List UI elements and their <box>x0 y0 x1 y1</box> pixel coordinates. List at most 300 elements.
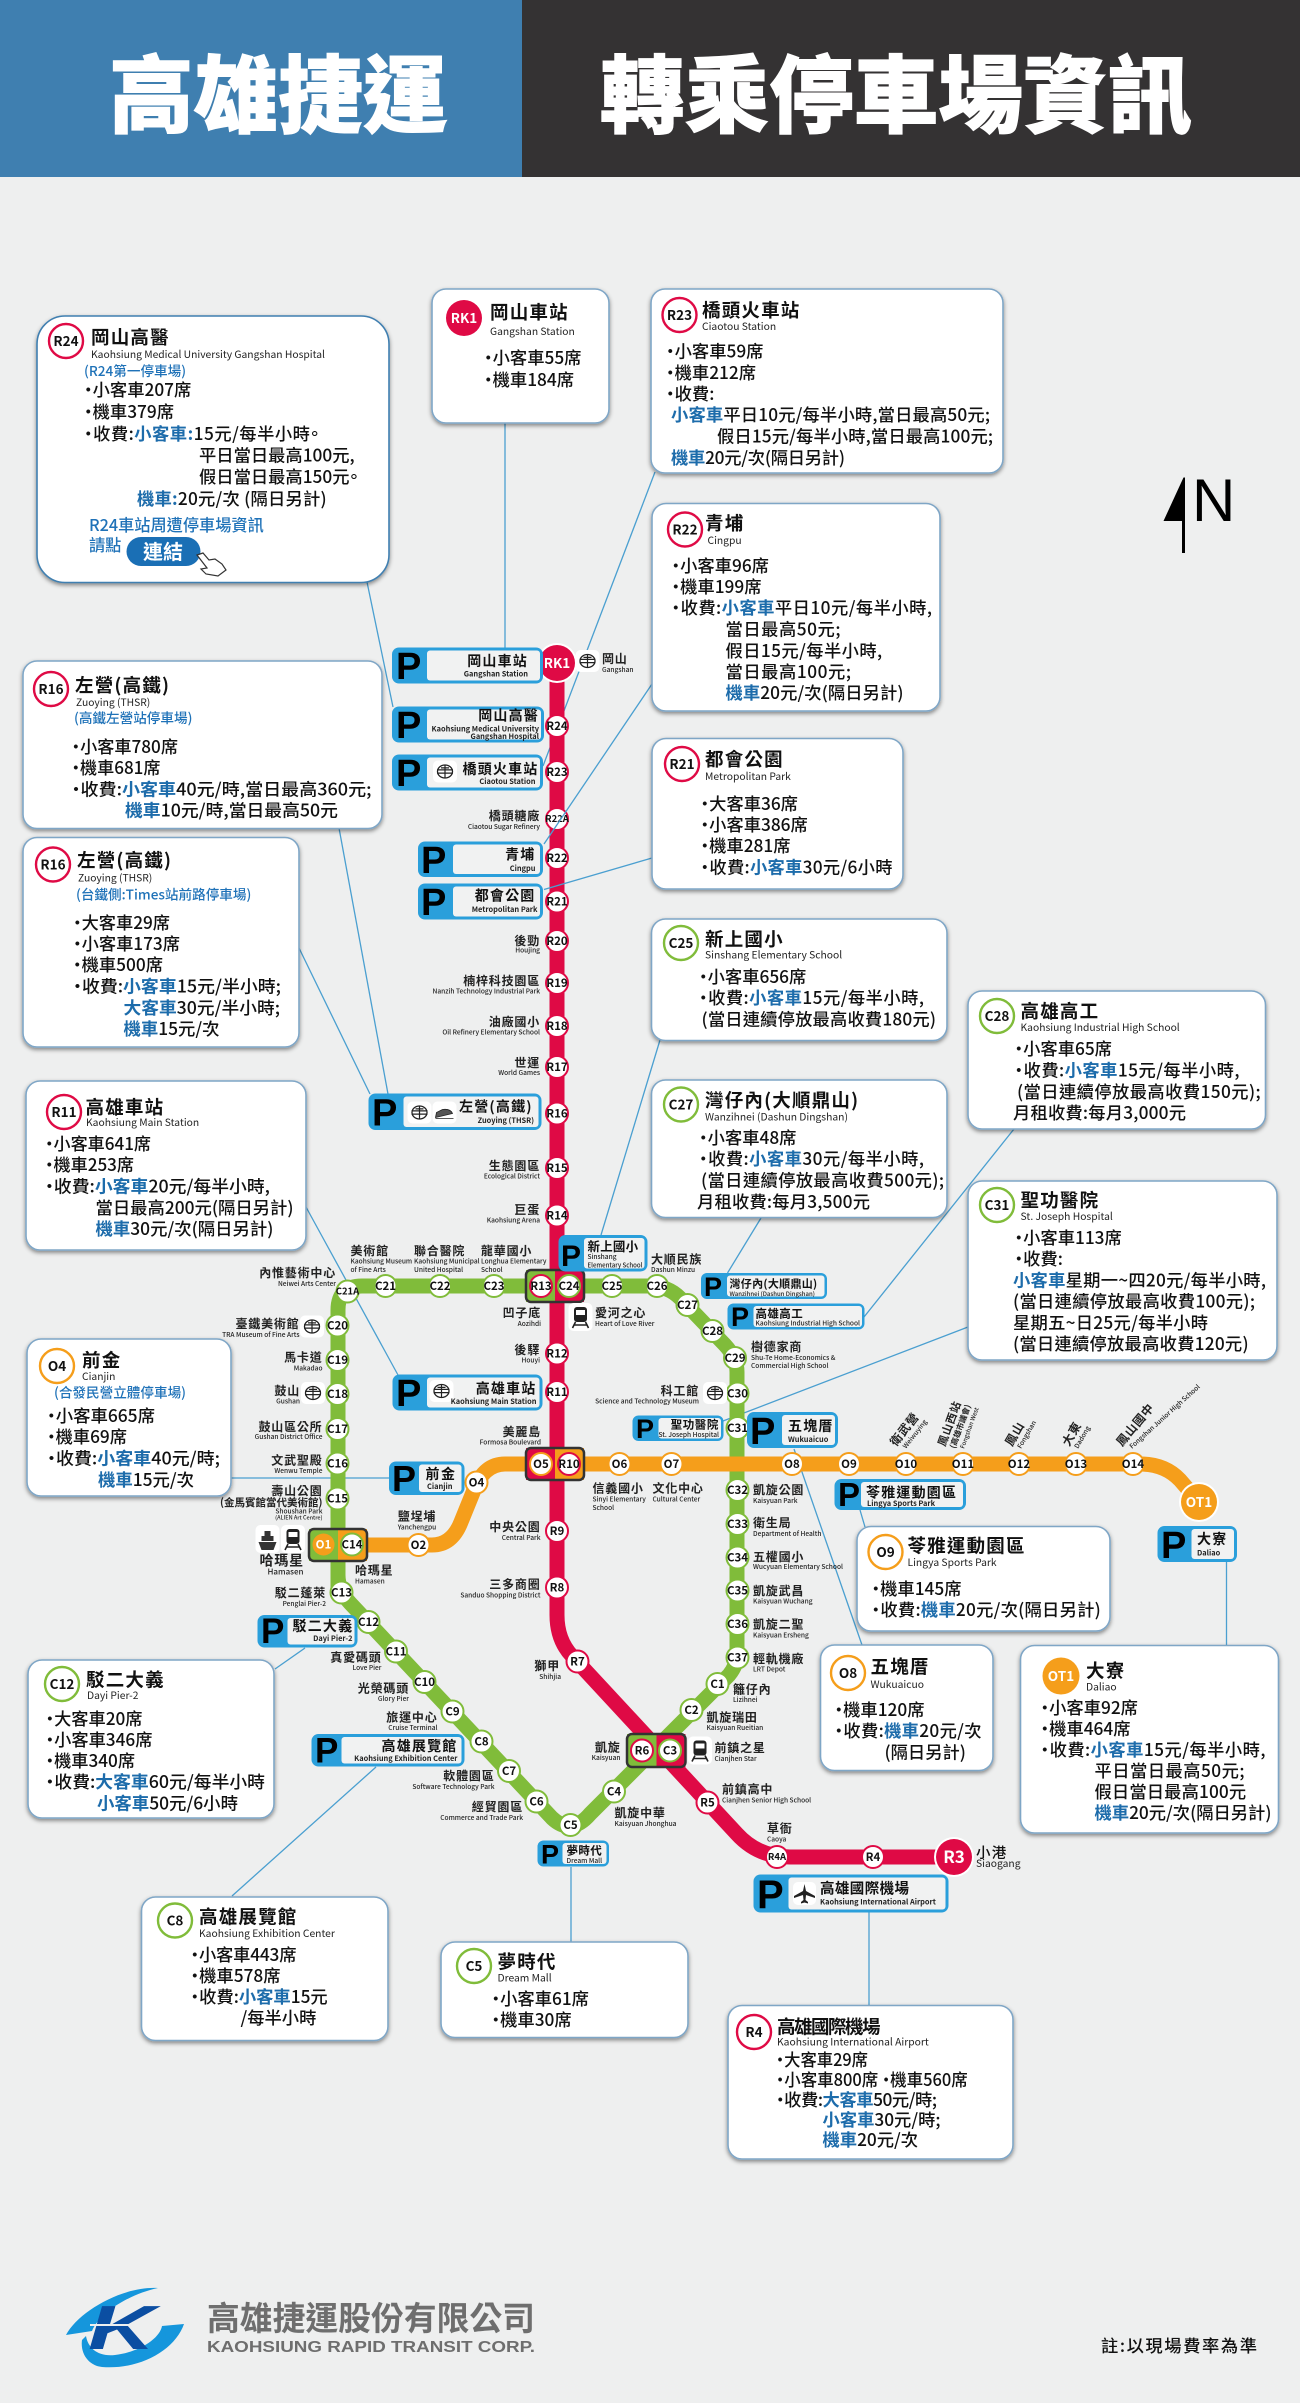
red line stations: R22A <box>545 811 570 825</box>
station labels: green line west: 鼓山 <box>274 1382 300 1399</box>
subtitle: R4: Kaohsiung International Airport <box>777 2034 929 2048</box>
P sign: St. Joseph Hospital: P <box>636 1414 654 1444</box>
station labels: red line: 油廠國小 <box>489 1013 540 1030</box>
details: R23: 小客車平日10元/每半小時,當日最高50元; <box>671 401 990 426</box>
details: C8 <box>190 1941 328 2029</box>
green line stations: C11 <box>385 1644 407 1660</box>
details: C12: ·大客車20席 <box>46 1705 142 1730</box>
icon: north arrow <box>1164 467 1235 553</box>
interchange: O5 R10: R10 <box>558 1456 580 1472</box>
details: C5 <box>492 1985 589 2031</box>
station labels: green line east: 五權國小 <box>753 1548 804 1565</box>
details: R21: ·收費:小客車30元/6小時 <box>700 854 892 878</box>
red line stations: R9 <box>550 1523 565 1539</box>
P sign: Gangshan Station <box>392 646 543 688</box>
orange line stations: O14 <box>1122 1456 1144 1472</box>
panel: RK1 Gangshan Station <box>432 289 609 423</box>
details: R24: 機車:20元/次 (隔日另計) <box>137 485 327 510</box>
details: OT1: 假日當日最高100元 <box>1094 1778 1246 1803</box>
station labels: green line east: 凱旋武昌 <box>753 1582 804 1599</box>
P sign: KMU Gangshan Hospital: P <box>396 705 421 747</box>
station labels: red line: 美麗島 <box>503 1423 541 1440</box>
P sign: St. Joseph Hospital: St. Joseph Hospital <box>658 1429 719 1439</box>
green line stations: C18 <box>327 1386 348 1402</box>
green line stations: C25 <box>601 1278 623 1294</box>
station labels: red line: Sanduo Shopping District <box>460 1590 541 1600</box>
panel: C27 Wanzihnei <box>652 1080 947 1218</box>
details: O4 <box>47 1382 220 1491</box>
P sign: Gangshan Station: P <box>396 646 421 688</box>
panel: C31 St. Joseph Hospital <box>968 1181 1277 1360</box>
details: R16: ·收費:小客車40元/時,當日最高360元; <box>72 776 372 800</box>
green line stations: C34 <box>727 1550 748 1566</box>
red line stations: R19 <box>546 975 568 991</box>
station labels: red line: Ciaotou Sugar Refinery <box>468 821 540 831</box>
P sign: Wukuaicuo: Wukuaicuo <box>788 1434 829 1445</box>
metro line: orange line <box>366 1464 1199 1545</box>
orange line stations: OT1 <box>1186 1491 1212 1511</box>
green line stations: C13 <box>331 1584 352 1600</box>
green line stations: C37 <box>727 1650 748 1666</box>
details: R22: 機車20元/次(隔日另計) <box>726 679 904 704</box>
details: R24: ·機車379席 <box>84 398 174 423</box>
orange line stations: O12 <box>1008 1456 1030 1472</box>
station labels: red line: Kaohsiung Arena <box>487 1214 540 1224</box>
details: C27: 月租收費:每月3,500元 <box>697 1188 870 1213</box>
details: C25: (當日連續停放最高收費180元) <box>702 1006 936 1030</box>
details: R16: ·機車681席 <box>72 754 160 779</box>
station labels: red line: Cianjhen Senior High School <box>722 1794 811 1804</box>
subtitle: C12: Dayi Pier-2 <box>87 1687 139 1702</box>
station labels: green line east: 前鎮之星 <box>714 1739 766 1756</box>
details: O9: ·機車145席 <box>872 1575 962 1600</box>
panel: R16 Zuoying Times lot <box>23 838 299 1047</box>
details: R24: ·小客車207席 <box>84 376 191 401</box>
details: O8: (隔日另計) <box>884 1738 966 1764</box>
station labels: green line west: Neiwei Arts Center <box>278 1278 336 1288</box>
subtitle: C28: Kaohsiung Industrial High School <box>1020 1019 1180 1034</box>
station labels: green line east: Kaisyuan Jhonghua <box>614 1818 677 1828</box>
P sign: Wukuaicuo: 五塊厝 <box>788 1416 834 1436</box>
station labels: green line west: Commerce and Trade Park <box>440 1812 523 1822</box>
station labels: green line west: Kaohsiung Museum <box>350 1256 412 1266</box>
subtitle: C5: Dream Mall <box>498 1970 552 1984</box>
title: Kaohsiung Metro: 高雄捷運 <box>109 29 447 151</box>
badge: C27 <box>664 1088 698 1122</box>
details: C8: /每半小時 <box>240 2004 316 2029</box>
station labels: green line east: Shu-Te Home-Economics & <box>751 1352 836 1362</box>
connector lines <box>231 423 1226 2006</box>
P sign: International Airport: P <box>757 1873 784 1917</box>
station labels: green line west: Love Pier <box>353 1662 382 1672</box>
details: C25 <box>699 963 936 1030</box>
station labels: red line: Kaisyuan <box>592 1752 620 1762</box>
station labels: red line: 獅甲 <box>534 1657 560 1674</box>
station labels: green line west: Wenwu Temple <box>274 1465 323 1475</box>
station labels: green line west: 經貿園區 <box>472 1798 523 1815</box>
heading: R16: 左營(高鐵) <box>75 672 170 698</box>
details: C27 <box>697 1124 944 1213</box>
green line stations: C1 <box>710 1676 725 1692</box>
station labels: green line east: 籬仔內 <box>733 1680 771 1698</box>
P sign: Cianjin: Cianjin <box>427 1481 453 1492</box>
badge: C12 <box>45 1667 79 1701</box>
station labels: green line east: Science and Technology Museum <box>595 1396 699 1406</box>
P sign: Sinshang Elementary: 新上國小 <box>588 1236 639 1255</box>
P sign: Cingpu: P <box>421 840 446 882</box>
details: R11: ·收費:小客車20元/每半小時, <box>45 1172 270 1198</box>
details: R11: 機車30元/次(隔日另計) <box>96 1215 274 1240</box>
details: C27: ·收費:小客車30元/每半小時, <box>699 1145 924 1170</box>
heading: OT1: 大寮 <box>1086 1658 1125 1684</box>
station labels: green line west: 文武聖殿 <box>271 1452 322 1468</box>
red line stations: R4A <box>768 1849 787 1863</box>
P sign: KMU Gangshan Hospital: 岡山高醫 <box>478 706 539 726</box>
P sign: Sinshang Elementary: P <box>561 1240 581 1273</box>
subtitle: O9: Lingya Sports Park <box>908 1554 997 1569</box>
details: R16: (高鐵左營站停車場) <box>74 707 192 727</box>
station labels: orange line: (高雄市議會) <box>947 1403 974 1450</box>
badge: C25 <box>664 926 698 960</box>
green line stations: C21A <box>336 1284 360 1298</box>
subtitle: R21: Metropolitan Park <box>705 768 791 783</box>
station labels: red line: Oil Refinery Elementary School <box>442 1026 540 1036</box>
station labels: red line: 後驛 <box>514 1341 540 1358</box>
red line stations <box>537 643 974 1877</box>
station labels: green line west: 旅運中心 <box>386 1708 438 1726</box>
P sign: Lingya Sports Park: Lingya Sports Park <box>867 1498 936 1509</box>
details: C28: ·小客車65席 <box>1014 1035 1112 1060</box>
station labels: red line: Gangshan <box>602 664 634 674</box>
station labels: orange line: Fongshan <box>1014 1418 1038 1450</box>
details: R16 <box>72 707 372 822</box>
badge: R22: R22 <box>672 518 698 538</box>
logo: Kaohsiung Rapid Transit <box>66 2288 535 2367</box>
P sign: Zuoying THSR: 左營(高鐵) <box>459 1096 533 1116</box>
P sign: Lingya Sports Park: P <box>838 1476 860 1513</box>
station labels: orange line: 文化中心 <box>652 1480 704 1496</box>
P sign: Sinshang Elementary: Sinshang <box>588 1251 617 1261</box>
badge: C5: C5 <box>466 1955 482 1975</box>
P sign: Wanzihnei: 灣仔內(大順鼎山) <box>730 1276 818 1292</box>
station labels: orange line: Fongshan West <box>957 1405 981 1450</box>
heading: C28: 高雄高工 <box>1020 998 1099 1024</box>
station labels: green line east: Department of Health <box>753 1528 821 1538</box>
P sign: Zuoying THSR: P <box>372 1092 397 1134</box>
station labels: red line: Caoya <box>767 1834 787 1844</box>
details: O8: ·收費:機車20元/次 <box>834 1717 982 1742</box>
details: C8: ·收費:小客車15元 <box>190 1983 328 2008</box>
details: C12: ·機車340席 <box>46 1747 135 1772</box>
station labels: green line west: 龍華國小 <box>481 1242 532 1259</box>
station labels: green line west: 軟體園區 <box>443 1767 494 1784</box>
details: R4: ·小客車800席 ·機車560席 <box>776 2066 968 2091</box>
red line stations: R20 <box>546 933 568 949</box>
red line stations: R8 <box>550 1580 565 1596</box>
details: R23 <box>666 338 993 469</box>
details: R23: 機車20元/次(隔日另計) <box>671 444 845 469</box>
details: R11: ·機車253席 <box>45 1151 134 1176</box>
details: R16: ·小客車173席 <box>73 930 180 955</box>
details: R24: 請點 <box>89 532 121 556</box>
station labels: red line: Shihjia <box>539 1671 561 1681</box>
badge: O8: O8 <box>839 1662 857 1682</box>
P sign: Gangshan Station: Gangshan Station <box>464 668 528 680</box>
badge: C28: C28 <box>985 1005 1009 1025</box>
details: R16 <box>73 884 281 1040</box>
subtitle: C8: Kaohsiung Exhibition Center <box>199 1925 336 1940</box>
heading: C25: 新上國小 <box>705 926 784 952</box>
details: OT1: ·機車464席 <box>1040 1715 1131 1740</box>
station labels: green line east: Kaisyuan Rueitian <box>706 1722 763 1732</box>
green line stations: C21 <box>375 1278 396 1294</box>
badge: RK1 <box>446 300 482 336</box>
station labels: green line east: 衛生局 <box>753 1514 791 1531</box>
badge: C31: C31 <box>985 1194 1009 1214</box>
station labels: red line: 中央公園 <box>489 1518 540 1535</box>
station labels: green line west: Gushan District Office <box>255 1431 323 1441</box>
badge: O9: O9 <box>876 1541 895 1561</box>
connector: R23 behind the red line <box>543 472 655 766</box>
subtitle: C31: St. Joseph Hospital <box>1020 1208 1113 1223</box>
station labels: red line: 凹子底 <box>503 1304 541 1321</box>
P sign: St. Joseph Hospital: 聖功醫院 <box>671 1416 719 1432</box>
station labels: orange line: Sinyi Elementary <box>592 1494 646 1504</box>
red line stations: RK1 <box>544 652 570 672</box>
P sign: Daliao: P <box>1161 1525 1186 1567</box>
icon: ferry <box>256 1525 280 1553</box>
subtitle: OT1: Daliao <box>1086 1678 1117 1694</box>
P sign: Cingpu: 青埔 <box>505 844 536 864</box>
badge: R22 <box>668 512 702 546</box>
station labels: red line: Siaogang <box>976 1855 1021 1870</box>
green line stations: C33 <box>727 1516 748 1532</box>
P sign: Metropolitan Park: Metropolitan Park <box>472 904 538 915</box>
subtitle: RK1: Gangshan Station <box>490 323 575 338</box>
details: C25: ·小客車656席 <box>699 963 806 988</box>
panel: R22 Cingpu <box>652 504 940 711</box>
panel: O4 Cianjin <box>27 1339 231 1496</box>
details: C12: 小客車50元/6小時 <box>97 1790 238 1814</box>
green line stations: C15 <box>327 1490 348 1506</box>
badge: R24 <box>49 324 83 358</box>
station labels: orange line: 鳳山國中 <box>1112 1399 1158 1450</box>
panel: C28 Kaohsiung Industrial HS <box>968 991 1266 1129</box>
station labels: red line: 生態園區 <box>489 1157 540 1174</box>
badge: R16: R16 <box>40 854 66 874</box>
green line stations: C2 <box>684 1702 699 1718</box>
heading: C27: 灣仔內(大順鼎山) <box>705 1087 859 1113</box>
orange line stations: O13 <box>1065 1456 1087 1472</box>
P sign: Dream Mall <box>538 1840 609 1870</box>
station labels: green line east: 凱旋中華 <box>614 1804 666 1821</box>
P sign: Wanzihnei: P <box>704 1272 722 1302</box>
P sign: Exhibition Center: Kaohsiung Exhibition Center <box>354 1753 458 1764</box>
station labels: green line east: 樹德家商 <box>751 1338 802 1355</box>
badge: R11: R11 <box>51 1101 77 1121</box>
heading: R16: 左營(高鐵) <box>77 847 172 873</box>
details: OT1 <box>1040 1694 1272 1824</box>
badge: C5 <box>457 1949 491 1983</box>
green line stations: C35 <box>727 1582 748 1598</box>
badge: OT1 <box>1042 1658 1080 1694</box>
red line stations: R22 <box>546 850 568 866</box>
station labels: orange line: Fongshan Junior High School <box>1127 1381 1202 1450</box>
details: C27: (當日連續停放最高收費500元); <box>701 1166 944 1192</box>
station labels: green line west: (金馬賓館當代美術館) <box>220 1495 323 1510</box>
badge: R16: R16 <box>38 678 64 698</box>
badge: C31 <box>980 1188 1014 1222</box>
subtitle: R11: Kaohsiung Main Station <box>86 1114 199 1129</box>
P sign: Cianjin <box>389 1458 464 1499</box>
panel: R23 Ciaotou Station <box>651 289 1003 473</box>
P sign: Dayi Pier-2: P <box>261 1612 284 1651</box>
details: C8: ·機車578席 <box>190 1962 281 1987</box>
heading: R23: 橋頭火車站 <box>702 297 801 323</box>
P sign: KMU Gangshan Hospital <box>392 705 544 747</box>
details: R21: ·小客車386席 <box>700 811 808 836</box>
station labels: green line west: of Fine Arts <box>350 1264 386 1274</box>
station labels: red line: Central Park <box>502 1532 541 1542</box>
badge: O4: O4 <box>48 1355 66 1375</box>
green line stations: C12 <box>358 1614 379 1630</box>
green line stations: C28 <box>702 1323 723 1339</box>
heading: O8: 五塊厝 <box>870 1654 930 1680</box>
station labels: green line west: Glory Pier <box>378 1693 409 1703</box>
station labels: red line: Nanzih Technology Industrial Park <box>433 986 540 996</box>
icon: airplane <box>794 1884 815 1904</box>
station labels: green line west: 臺鐵美術館 <box>235 1315 300 1332</box>
station labels: green line east: Cianjhen Star <box>714 1753 757 1763</box>
P sign: International Airport: Kaohsiung International Airport <box>820 1896 936 1908</box>
orange line stations: O4 <box>469 1474 485 1490</box>
icon: pointing hand <box>197 553 226 576</box>
station labels: green line east <box>595 1250 843 1828</box>
green line stations: C8 <box>474 1734 489 1750</box>
station labels: green line west: Penglai Pier-2 <box>283 1598 326 1608</box>
heading: R11: 高雄車站 <box>86 1094 164 1120</box>
details: R24: 假日當日最高150元。 <box>199 463 358 488</box>
details: OT1: ·小客車92席 <box>1040 1694 1138 1719</box>
red line stations: R23 <box>546 764 568 780</box>
panel: R4 International Airport <box>728 2006 1013 2159</box>
interchange: O1 C14: C14 <box>341 1536 363 1552</box>
orange line stations <box>408 1453 1219 1556</box>
red line stations: R5 <box>700 1794 715 1810</box>
heading: R24: 岡山高醫 <box>91 324 170 350</box>
green line stations: C26 <box>646 1278 668 1294</box>
panel: R11 Kaohsiung Main Station <box>26 1081 306 1250</box>
badge: C28 <box>980 999 1014 1033</box>
details: R16: ·小客車780席 <box>72 733 178 758</box>
details: R24: 平日當日最高100元, <box>199 442 355 466</box>
station labels: red line: 凱旋 <box>595 1738 620 1756</box>
details: R22: ·機車199席 <box>672 573 762 598</box>
details: O4: ·小客車665席 <box>47 1402 155 1427</box>
station labels: green line west: 內惟藝術中心 <box>259 1264 336 1281</box>
details: RK1: ·小客車55席 <box>484 344 581 369</box>
details: R24: ·收費:小客車:15元/每半小時。 <box>84 420 319 445</box>
details: O4: ·收費:小客車40元/時; <box>47 1444 220 1470</box>
station labels: red line: Houyi <box>521 1354 540 1364</box>
details: R21 <box>700 790 892 878</box>
details: R22: 當日最高50元; <box>726 616 840 640</box>
P sign: KMU Gangshan Hospital: Gangshan Hospital <box>471 731 540 742</box>
details: R22: 假日15元/每半小時, <box>726 637 882 662</box>
panel: R21 Metropolitan Park <box>652 738 903 889</box>
details: RK1 <box>484 344 581 391</box>
red line stations: R11 <box>546 1384 568 1400</box>
details: R16: 機車15元/次 <box>124 1015 220 1040</box>
interchange: O1 C14 <box>309 1529 367 1561</box>
details: R22: ·收費:小客車平日10元/每半小時, <box>672 594 932 619</box>
badge: C12: C12 <box>50 1673 74 1693</box>
P sign: Sinshang Elementary <box>558 1235 648 1273</box>
station labels: red line: 愛河之心 <box>595 1304 646 1321</box>
station labels: orange line: 鳳山西站 <box>934 1399 965 1448</box>
interchange: O5 R10: O5 <box>533 1456 549 1472</box>
P sign: Wanzihnei <box>701 1272 827 1302</box>
station labels: green line west: Longhua Elementary <box>481 1256 547 1266</box>
P sign: Dream Mall: P <box>541 1840 559 1870</box>
interchange: R6 C3: C3 <box>663 1742 677 1758</box>
panel: C12 Dayi Pier-2 <box>28 1660 274 1818</box>
station labels: red line: Ecological District <box>484 1170 540 1180</box>
details: R16: ·收費:小客車15元/半小時; <box>73 972 281 998</box>
station labels: green line west: 駁二蓬萊 <box>275 1584 326 1601</box>
station labels: red line: Heart of Love River <box>595 1318 655 1328</box>
station labels: green line west: Hamasen <box>355 1576 385 1586</box>
station labels: green line east: 大順民族 <box>651 1250 702 1268</box>
station labels: green line west: Makadao <box>294 1362 322 1372</box>
details: R4: 機車20元/次 <box>822 2126 918 2151</box>
green line stations: C32 <box>727 1482 748 1498</box>
badge: OT1: OT1 <box>1048 1665 1074 1685</box>
badge: C25: C25 <box>669 932 693 952</box>
badge: C8: C8 <box>167 1910 183 1930</box>
P sign: Metropolitan Park <box>418 882 543 924</box>
station labels: red line: 小港 <box>976 1842 1007 1863</box>
station labels: green line east: Wucyuan Elementary School <box>753 1561 843 1571</box>
station labels: orange line: 衛武營 <box>886 1409 923 1449</box>
details: C28: 月租收費:每月3,000元 <box>1013 1099 1186 1124</box>
P sign: Dayi Pier-2 <box>258 1612 358 1651</box>
P sign: Cianjin: P <box>392 1458 416 1499</box>
details: R16: ·大客車29席 <box>73 909 170 934</box>
badge: C8 <box>158 1904 192 1938</box>
details: C5: ·機車30席 <box>492 2006 572 2031</box>
details: C28 <box>1013 1035 1261 1124</box>
P sign: Ciaotou Station: P <box>396 753 421 795</box>
subtitle: C27: Wanzihnei (Dashun Dingshan) <box>705 1108 848 1124</box>
subtitle: R23: Ciaotou Station <box>702 318 776 333</box>
orange line stations: O8 <box>784 1456 800 1472</box>
red line stations: R3 <box>943 1843 965 1868</box>
green line stations: C16 <box>327 1456 348 1472</box>
logo wordmark: English: KAOHSIUNG RAPID TRANSIT CORP. <box>207 2339 535 2356</box>
details: R11 <box>45 1130 294 1240</box>
badge: R11 <box>47 1095 81 1129</box>
station labels: red line <box>433 650 1021 1870</box>
green line stations: C6 <box>529 1794 544 1810</box>
heading: C5: 夢時代 <box>498 1948 557 1974</box>
station labels: orange line: 信義國小 <box>592 1480 644 1496</box>
station labels: green line west: Cruise Terminal <box>388 1722 438 1732</box>
subtitle: O8: Wukuaicuo <box>870 1676 924 1691</box>
P sign: St. Joseph Hospital <box>632 1414 724 1444</box>
subtitle: R16: Zuoying (THSR) <box>78 870 152 884</box>
red line stations: R16 <box>546 1106 568 1122</box>
